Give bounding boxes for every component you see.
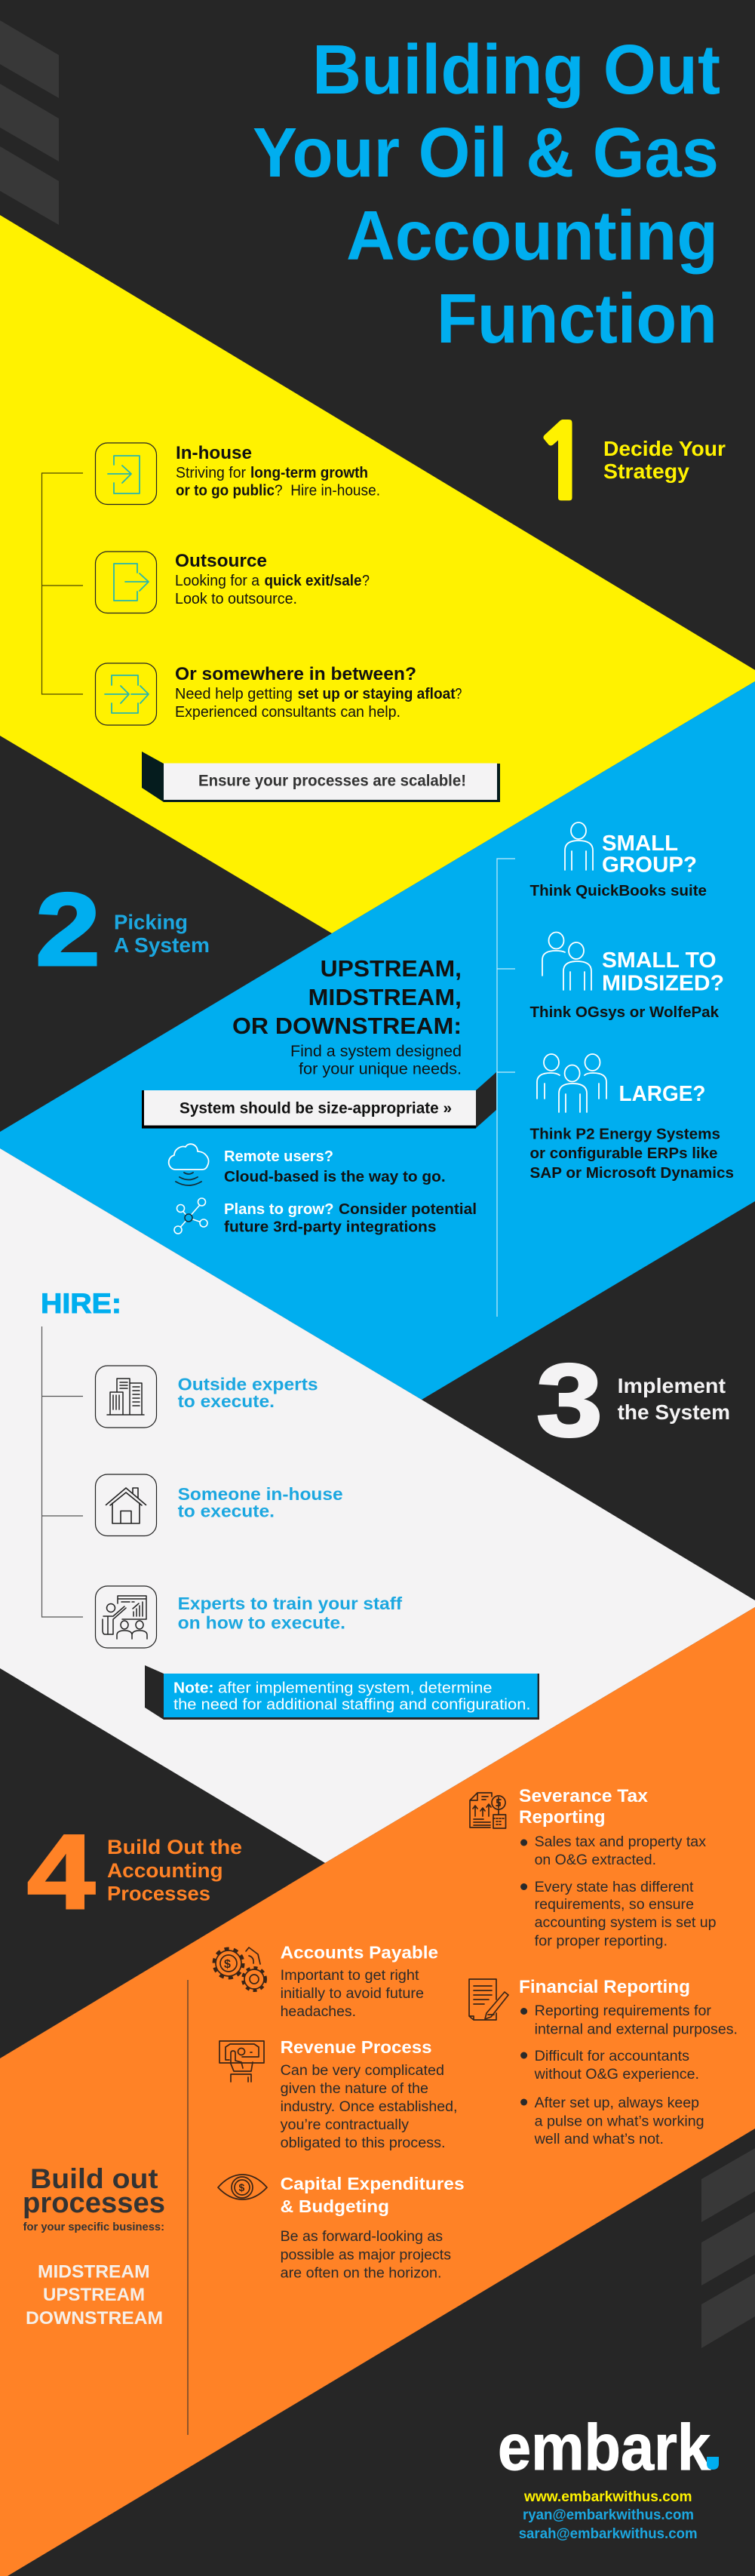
callout: note [145,1665,539,1720]
icon: gears [214,1947,265,1990]
icon: financial report and pencil [469,1979,508,2020]
callout: scalable processes: Ensure your processes are scalable! [198,773,466,789]
panel: white section background [0,1148,755,1863]
text: outsource: Look to outsource. [175,591,297,607]
text: experts to train: on how to execute. [178,1613,345,1633]
icon: eye with dollar [218,2175,267,2199]
text: find a system: Find a system designed [290,1043,462,1060]
step 4 heading: Accounting [107,1859,223,1882]
text: capital expenditures: & Budgeting [281,2196,389,2216]
text: large [529,1082,734,1182]
text: build out processes [23,2163,165,2233]
hire bracket connector [42,1326,83,1617]
icon: gears: $ [224,1958,231,1971]
panel: yellow section background [0,215,755,933]
text: revenue process: Revenue Process [281,2037,432,2057]
text: in-house: or to go public [176,483,275,500]
text: somewhere in between: Need help getting [175,686,293,702]
text: small to midsized: Think OGsys or WolfePak [529,1004,720,1021]
text: plans to grow: Consider potential [339,1201,477,1218]
text: remote users [224,1148,446,1185]
icon: hand with money [219,2041,264,2082]
text: build out processes: processes [23,2187,165,2219]
text: accounts payable: initially to avoid future [281,1986,424,2002]
text: build out processes: for your specific business: [23,2221,164,2233]
icon: house [95,1474,157,1536]
step 1 heading [603,437,726,483]
icon: single person [565,822,593,870]
callout: size-appropriate: System should be size-appropriate » [180,1100,452,1117]
text: financial reporting: After set up, always keep [535,2095,699,2111]
title: Function [437,279,717,358]
text: remote users: Cloud-based is the way to go. [224,1169,446,1185]
step 2 heading: Picking [114,910,188,934]
step 1 bracket connector [42,473,83,694]
step 3 heading: Implement [618,1374,726,1397]
text: capital expenditures: are often on the horizon. [281,2265,442,2282]
text: financial reporting [519,1977,738,2147]
text: financial reporting: Reporting requirements for [535,2003,712,2019]
step 1 number: 1 [532,413,594,515]
text: severance tax reporting: accounting system is set up [535,1915,717,1931]
title [253,30,720,358]
text: small to midsized: SMALL TO [602,948,717,973]
step 1 heading: Decide Your [603,437,726,460]
text: small to midsized [529,948,724,1021]
text: outsource [175,551,370,607]
step 2 heading [114,910,210,957]
text: severance tax reporting: Reporting [519,1807,606,1827]
text: severance tax reporting: Sales tax and property tax [535,1834,707,1850]
icon: outsource door [95,552,157,613]
text: small to midsized: MIDSIZED? [602,972,724,996]
text: revenue process: Can be very complicated [281,2063,444,2079]
text: revenue process: obligated to this process. [281,2135,445,2151]
contact details: sarah@embarkwithus.com [519,2526,698,2542]
text: accounts payable: headaches. [281,2004,356,2020]
text: small group: Think QuickBooks suite [529,883,707,899]
text: revenue process: industry. Once established, [281,2099,457,2115]
text: financial reporting: Difficult for accountants [535,2049,689,2064]
text: large: Think P2 Energy Systems [529,1126,720,1142]
text: outside experts: Outside experts [178,1375,318,1394]
contact details: www.embarkwithus.com [523,2489,692,2505]
text: stream list: DOWNSTREAM [26,2308,163,2329]
text: build out processes: Build out [30,2163,158,2194]
text: large: LARGE? [618,1082,706,1106]
heading: stream types: OR DOWNSTREAM: [232,1013,462,1039]
icon: cloud [169,1144,209,1185]
text: someone in-house: Someone in-house [178,1484,343,1504]
text: outsource: quick exit/sale [264,573,362,589]
panel: blue section background [0,681,755,1400]
step 4 heading: Build Out the [107,1836,242,1858]
text: plans to grow [224,1201,477,1236]
step 2 heading: A System [114,933,210,957]
text: outside experts: to execute. [178,1391,275,1411]
text: financial reporting: Financial Reporting [519,1977,690,1997]
step 2 number: 2 [35,872,100,988]
icon: network nodes [174,1198,207,1234]
text: find a system: for your unique needs. [299,1061,462,1077]
decorative stripes: top left [0,20,59,225]
icon: three people [537,1054,606,1112]
text: find a system [290,1043,462,1077]
step 4 number: 4 [27,1812,95,1931]
text: severance tax reporting: for proper reporting. [535,1933,668,1950]
text: small group: SMALL [602,832,678,856]
text: somewhere in between: set up or staying afloat [298,686,456,702]
title: Accounting [346,196,718,275]
icon: two people [542,933,591,990]
text: somewhere in between [175,664,462,721]
left rule of process column [187,1980,189,2435]
text: experts to train: Experts to train your staff [178,1594,402,1613]
contact details: ryan@embarkwithus.com [523,2507,694,2523]
callout: note: the need for additional staffing and configuration. [173,1696,531,1713]
title: Building Out [312,30,720,109]
text: accounts payable [281,1942,438,2020]
text: outside experts [178,1375,318,1411]
title: Your Oil & Gas [253,113,719,192]
callout: scalable processes [142,752,500,802]
text: someone in-house: to execute. [178,1502,275,1521]
icon: in-between door [95,663,157,725]
text: somewhere in between: ? [455,686,462,702]
text: somewhere in between: Experienced consultants can help. [175,704,401,721]
text: revenue process: given the nature of the [281,2081,428,2097]
heading: stream types: UPSTREAM, [321,956,462,982]
text: stream list [26,2262,163,2329]
text: outsource: ? [362,573,370,589]
text: in-house: long-term growth [250,465,368,481]
text: plans to grow: Plans to grow? [224,1201,333,1218]
contact details [519,2489,698,2542]
heading: hire: HIRE: [41,1288,121,1319]
callout: note: Note: [173,1680,214,1696]
decorative stripes: bottom right [701,2148,755,2348]
text: capital expenditures: Be as forward-looking as [281,2229,443,2245]
text: revenue process [281,2037,457,2151]
text: severance tax reporting [519,1786,717,1950]
icon: severance tax report [470,1793,505,1828]
text: plans to grow: future 3rd-party integrations [224,1219,436,1236]
text: capital expenditures: possible as major projects [281,2247,451,2264]
callout: size-appropriate [142,1072,496,1129]
text: financial reporting: internal and external purposes. [535,2022,738,2037]
icon: eye with dollar: $ [238,2181,244,2193]
text: severance tax reporting: on O&G extracted. [535,1852,656,1868]
text: in-house: In-house [176,443,252,463]
text: outsource: Looking for a [175,573,260,589]
text: someone in-house [178,1484,343,1521]
text: financial reporting: without O&G experience. [534,2067,699,2083]
panel: orange section background [0,1607,755,2576]
text: large: SAP or Microsoft Dynamics [529,1165,734,1182]
text: severance tax reporting: Severance Tax [519,1786,649,1806]
text: accounts payable: Important to get right [281,1968,419,1984]
logo: embark: embark [498,2412,710,2484]
icon: presenter training [95,1586,157,1648]
text: stream list: UPSTREAM [43,2285,145,2305]
text: severance tax reporting: Every state has different [535,1880,694,1895]
text: somewhere in between: Or somewhere in between? [175,664,416,684]
icon: office buildings [95,1366,157,1428]
text: stream list: MIDSTREAM [38,2262,150,2282]
text: financial reporting: a pulse on what’s working [535,2114,704,2129]
text: large: or configurable ERPs like [529,1145,718,1162]
text: experts to train [178,1594,402,1633]
step 4 heading [107,1836,242,1904]
text: in-house: ? Hire in-house. [275,483,380,500]
heading: stream types: MIDSTREAM, [308,985,462,1010]
step 3 number: 3 [536,1343,603,1459]
text: revenue process: you’re contractually [281,2117,410,2133]
step 3 heading [618,1374,730,1424]
text: small group: GROUP? [602,853,697,877]
text: in-house: Striving for [176,465,246,481]
text: capital expenditures: Capital Expenditures [281,2174,465,2193]
step 3 heading: the System [618,1400,730,1424]
step 1 heading: Strategy [603,460,689,483]
text: in-house [176,443,380,500]
text: outsource: Outsource [175,551,267,571]
size options bracket [497,859,515,1317]
text: remote users: Remote users? [224,1148,333,1165]
step 4 heading: Processes [107,1882,210,1904]
text: financial reporting: well and what’s not. [534,2132,664,2147]
text: severance tax reporting: requirements, so ensure [535,1897,694,1913]
icon: in-house door [95,443,157,504]
text: small group [529,832,707,899]
callout: note: after implementing system, determine [218,1680,492,1696]
text: accounts payable: Accounts Payable [281,1942,438,1962]
heading: stream types [232,956,462,1039]
text: capital expenditures [281,2174,465,2282]
